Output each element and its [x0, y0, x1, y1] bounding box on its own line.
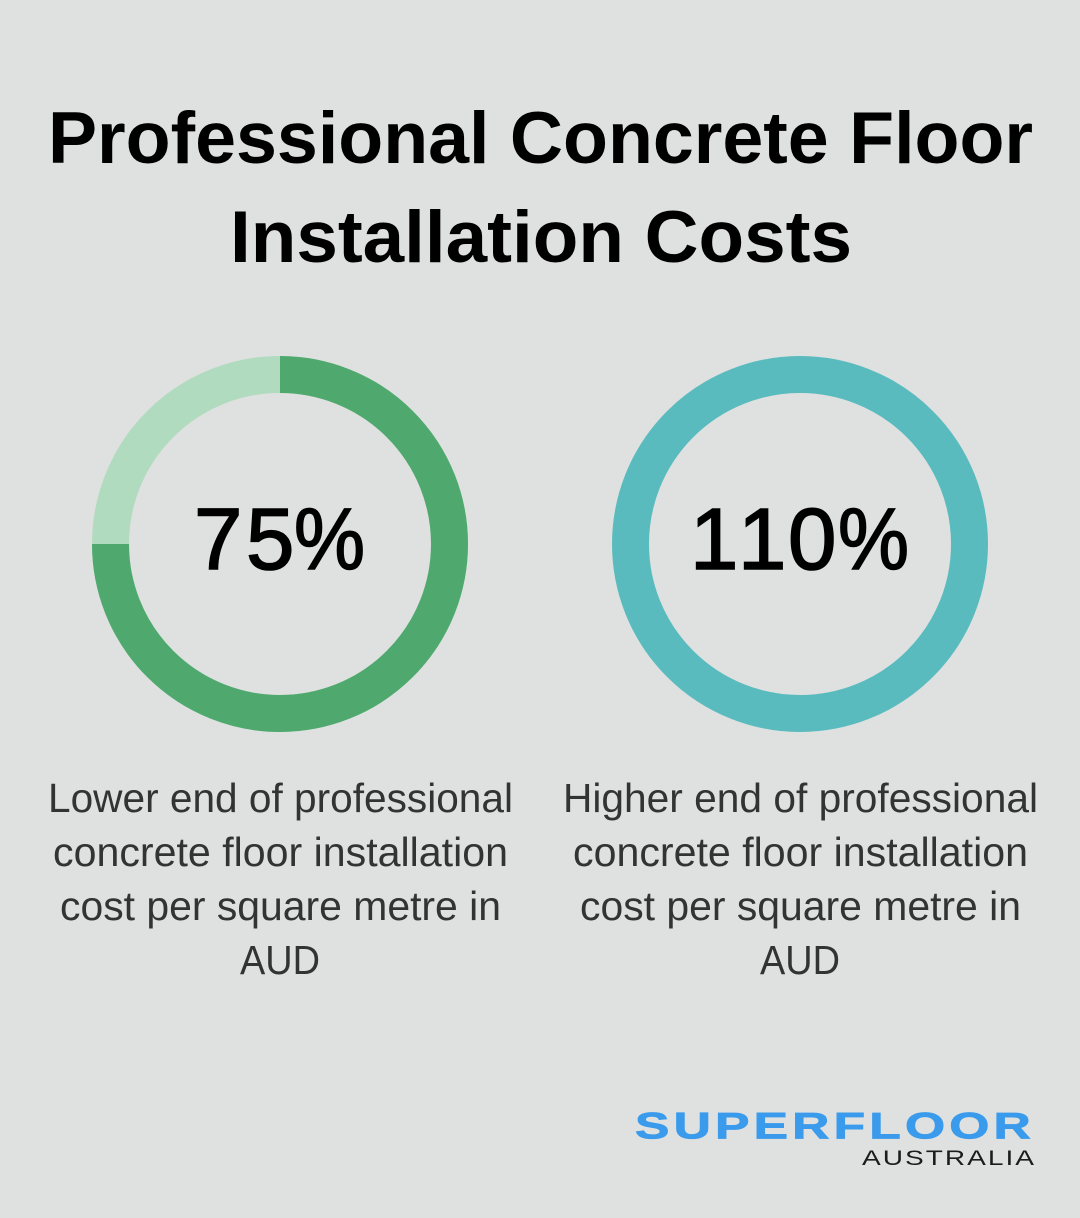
description: higher end [563, 775, 1038, 983]
value: 75%: % [294, 491, 365, 588]
panel: higher end [563, 374, 1038, 983]
value: 110% [690, 491, 909, 588]
value: 75%: 7 [194, 491, 242, 588]
description: lower end [48, 775, 513, 983]
description: higher end: AUD [760, 937, 840, 983]
logo: Superfloor Australia: SUPERFLOOR [635, 1106, 1035, 1146]
logo: Superfloor Australia: AUSTRALIA [862, 1147, 1036, 1170]
description: higher end: concrete floor installation [573, 829, 1028, 875]
description: lower end: cost per square metre in [60, 883, 501, 929]
description: lower end: AUD [240, 937, 320, 983]
description: lower end: Lower end of professional [48, 775, 513, 821]
description: higher end: cost per square metre in [580, 883, 1021, 929]
title [48, 98, 1033, 278]
value: 110%: 1 [690, 491, 738, 588]
value: 110%: 1 [738, 491, 786, 588]
description: higher end: Higher end of professional [563, 775, 1038, 821]
value: 75% [194, 491, 365, 588]
logo: Superfloor Australia [635, 1106, 1036, 1170]
value: 110%: % [838, 491, 909, 588]
donut chart: 75% [110, 374, 450, 714]
description: lower end: concrete floor installation [53, 829, 508, 875]
title: Professional Concrete Floor [48, 98, 1033, 179]
value: 110%: 0 [788, 491, 836, 588]
title: Installation Costs [230, 197, 852, 278]
donut chart: 110% [630, 374, 970, 714]
value: 75%: 5 [246, 491, 294, 588]
panel: lower end [48, 374, 513, 983]
